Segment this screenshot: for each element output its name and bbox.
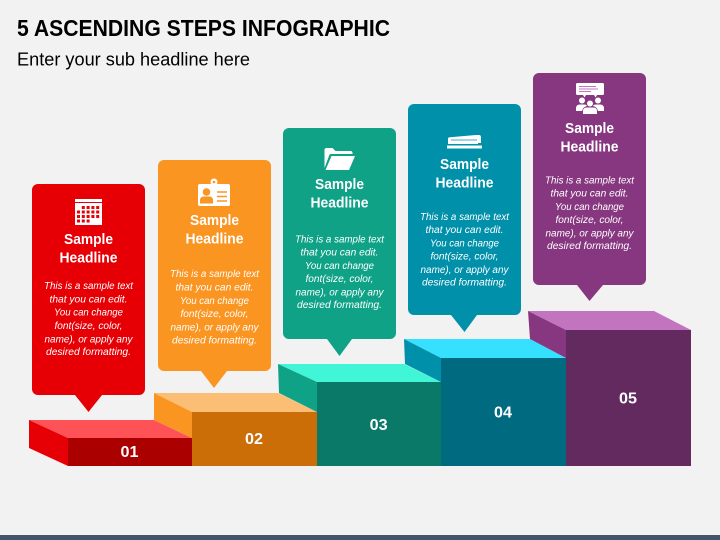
body text 04: name), or apply any bbox=[420, 265, 509, 276]
headline 05 bbox=[560, 120, 618, 156]
step 04 block bbox=[404, 339, 566, 466]
body text 03: This is a sample text bbox=[295, 234, 385, 245]
body text 01 bbox=[44, 281, 134, 358]
body text 02: You can change bbox=[180, 296, 249, 307]
body text 02: desired formatting. bbox=[172, 335, 257, 346]
headline 02: Headline bbox=[186, 231, 244, 248]
body text 04: font(size, color, bbox=[430, 252, 498, 262]
body text 04: This is a sample text bbox=[420, 212, 510, 223]
headline 05: Headline bbox=[560, 139, 618, 156]
body text 02: This is a sample text bbox=[170, 269, 260, 280]
icon: meeting bbox=[576, 83, 604, 114]
headline 03 bbox=[310, 176, 368, 212]
body text 05: font(size, color, bbox=[556, 215, 624, 226]
body text 04: desired formatting. bbox=[422, 278, 507, 289]
body text 03: You can change bbox=[305, 261, 374, 272]
body text 01: that you can edit. bbox=[50, 294, 128, 305]
body text 05: desired formatting. bbox=[547, 241, 632, 252]
body text 05: You can change bbox=[555, 202, 624, 213]
headline 01 bbox=[60, 231, 118, 267]
body text 01: desired formatting. bbox=[46, 347, 131, 358]
body text 05: name), or apply any bbox=[546, 228, 634, 239]
body text 01: This is a sample text bbox=[44, 281, 134, 292]
body text 02 bbox=[170, 269, 260, 346]
title: 5 ASCENDING STEPS INFOGRAPHIC bbox=[17, 15, 390, 41]
body text 01: You can change bbox=[54, 308, 123, 319]
panel: card 02 bbox=[158, 160, 271, 388]
step 01 block bbox=[29, 420, 192, 466]
body text 03: that you can edit. bbox=[300, 248, 378, 259]
subtitle: Enter your sub headline here bbox=[17, 50, 250, 70]
icon: stapler bbox=[447, 135, 482, 148]
headline 05: Sample bbox=[565, 120, 614, 137]
body text 01: name), or apply any bbox=[44, 334, 133, 345]
body text 04: that you can edit. bbox=[426, 225, 504, 236]
step number 04: 04 bbox=[494, 405, 512, 422]
headline 01: Headline bbox=[60, 250, 118, 267]
headline 02: Sample bbox=[190, 212, 239, 229]
step 05 block bbox=[528, 311, 691, 466]
headline 04: Sample bbox=[440, 156, 489, 173]
icon: calendar bbox=[75, 199, 102, 225]
headline 03: Sample bbox=[315, 176, 364, 193]
step number 02: 02 bbox=[245, 431, 263, 448]
body text 04 bbox=[420, 212, 510, 289]
headline 01: Sample bbox=[64, 231, 113, 248]
bottom bar bbox=[0, 535, 720, 540]
body text 03: font(size, color, bbox=[306, 274, 374, 285]
body text 05: that you can edit. bbox=[550, 189, 628, 200]
panel: card 03 bbox=[283, 128, 396, 356]
headline 03: Headline bbox=[310, 195, 368, 212]
step number 03: 03 bbox=[370, 417, 388, 434]
body text 02: name), or apply any bbox=[170, 322, 259, 333]
headline 02 bbox=[186, 212, 244, 248]
body text 03 bbox=[295, 234, 385, 311]
icon: id badge bbox=[198, 178, 230, 206]
panel: card 05 bbox=[533, 73, 646, 301]
body text 02: that you can edit. bbox=[176, 282, 254, 293]
icon: folder bbox=[324, 148, 355, 170]
headline 04: Headline bbox=[436, 175, 494, 192]
step 02 block bbox=[154, 393, 317, 466]
body text 03: name), or apply any bbox=[296, 287, 384, 298]
headline 04 bbox=[436, 156, 494, 192]
body text 04: You can change bbox=[430, 238, 499, 250]
step number 01: 01 bbox=[120, 444, 139, 461]
body text 05 bbox=[545, 175, 635, 252]
body text 05: This is a sample text bbox=[545, 175, 635, 186]
body text 01: font(size, color, bbox=[54, 321, 122, 332]
step number 05: 05 bbox=[619, 391, 637, 408]
body text 03: desired formatting. bbox=[297, 300, 382, 311]
body text 02: font(size, color, bbox=[180, 309, 248, 320]
panel: card 04 bbox=[408, 104, 521, 332]
step 03 block bbox=[278, 364, 441, 466]
panel: card 01 bbox=[32, 184, 145, 412]
